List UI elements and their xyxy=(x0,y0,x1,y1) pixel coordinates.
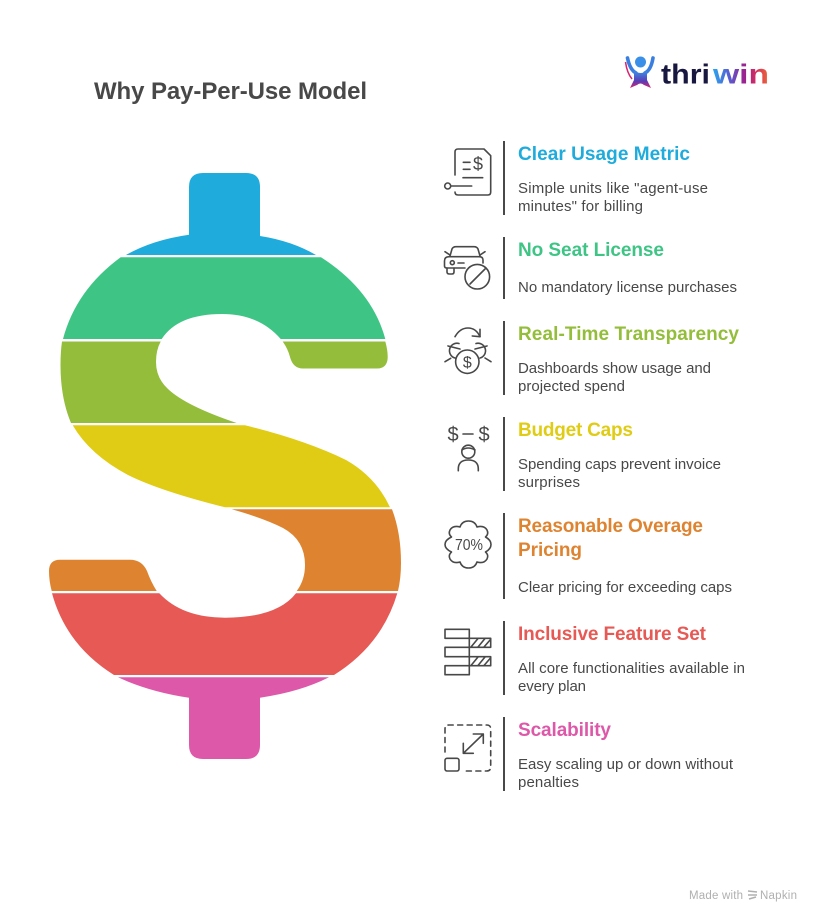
icon: person under dollar signs xyxy=(447,424,490,471)
item: Budget Caps xyxy=(447,417,721,491)
description: projected spend xyxy=(518,378,625,395)
item: Clear Usage Metric xyxy=(445,141,708,215)
footer: Made with Napkin xyxy=(689,890,797,902)
description xyxy=(518,660,745,695)
item: Reasonable Overage Pricing xyxy=(445,513,732,599)
description: All core functionalities available in xyxy=(518,660,745,677)
description: Clear pricing for exceeding caps xyxy=(518,579,732,596)
item: Inclusive Feature Set xyxy=(445,621,745,695)
heading xyxy=(518,516,703,561)
description: surprises xyxy=(518,474,580,491)
logo wordmark: thri xyxy=(661,58,710,90)
heading: Reasonable Overage xyxy=(518,516,703,537)
icon: 70 percent badge xyxy=(445,521,491,568)
item: Scalability xyxy=(445,717,734,791)
segment: red xyxy=(52,593,397,675)
footer: Made with Napkin: Made with xyxy=(689,890,743,902)
icon: stacked bars xyxy=(445,629,491,675)
icon: car with prohibition sign xyxy=(444,247,490,289)
segment: yellow xyxy=(73,425,390,507)
item: Real-Time Transparency xyxy=(445,321,739,395)
dollar sign chart xyxy=(49,173,401,759)
description: Easy scaling up or down without xyxy=(518,756,734,773)
description xyxy=(518,180,708,215)
icon: person under dollar signs: $ xyxy=(447,424,459,446)
icon: person under dollar signs: $ xyxy=(478,424,490,446)
icon: invoice document xyxy=(445,149,491,195)
description: minutes" for billing xyxy=(518,198,643,215)
segment: olive xyxy=(60,342,388,423)
description xyxy=(518,456,721,491)
footer: Made with Napkin: Napkin xyxy=(760,890,797,902)
segment: blue xyxy=(126,173,316,255)
description: penalties xyxy=(518,774,579,791)
heading: Budget Caps xyxy=(518,420,633,441)
description: every plan xyxy=(518,678,586,695)
description xyxy=(518,360,711,395)
segment: pink xyxy=(118,677,329,759)
icon: Napkin mark xyxy=(748,891,757,899)
heading: No Seat License xyxy=(518,240,664,261)
heading: Clear Usage Metric xyxy=(518,144,690,165)
heading: Real-Time Transparency xyxy=(518,324,739,345)
description: No mandatory license purchases xyxy=(518,279,737,296)
segment: green xyxy=(63,257,385,339)
segment: orange xyxy=(49,509,401,591)
icon: resize arrows xyxy=(445,725,491,771)
title: Why Pay-Per-Use Model xyxy=(94,78,367,105)
description: Dashboards show usage and xyxy=(518,360,711,377)
description: Spending caps prevent invoice xyxy=(518,456,721,473)
icon: coins with cycle arrow xyxy=(445,328,491,373)
description xyxy=(518,756,734,791)
icon: invoice document: $ xyxy=(473,154,483,174)
icon: 70 percent badge: 70% xyxy=(455,537,483,554)
logo: thriwin xyxy=(626,56,769,90)
heading: Inclusive Feature Set xyxy=(518,624,707,645)
heading: Pricing xyxy=(518,540,582,561)
logo wordmark xyxy=(661,58,769,90)
logo wordmark: win xyxy=(712,58,769,90)
description: Simple units like "agent-use xyxy=(518,180,708,197)
item: No Seat License xyxy=(444,237,737,299)
heading: Scalability xyxy=(518,720,611,741)
icon: logo figure xyxy=(626,56,653,88)
icon: coins with cycle arrow: $ xyxy=(463,354,472,372)
